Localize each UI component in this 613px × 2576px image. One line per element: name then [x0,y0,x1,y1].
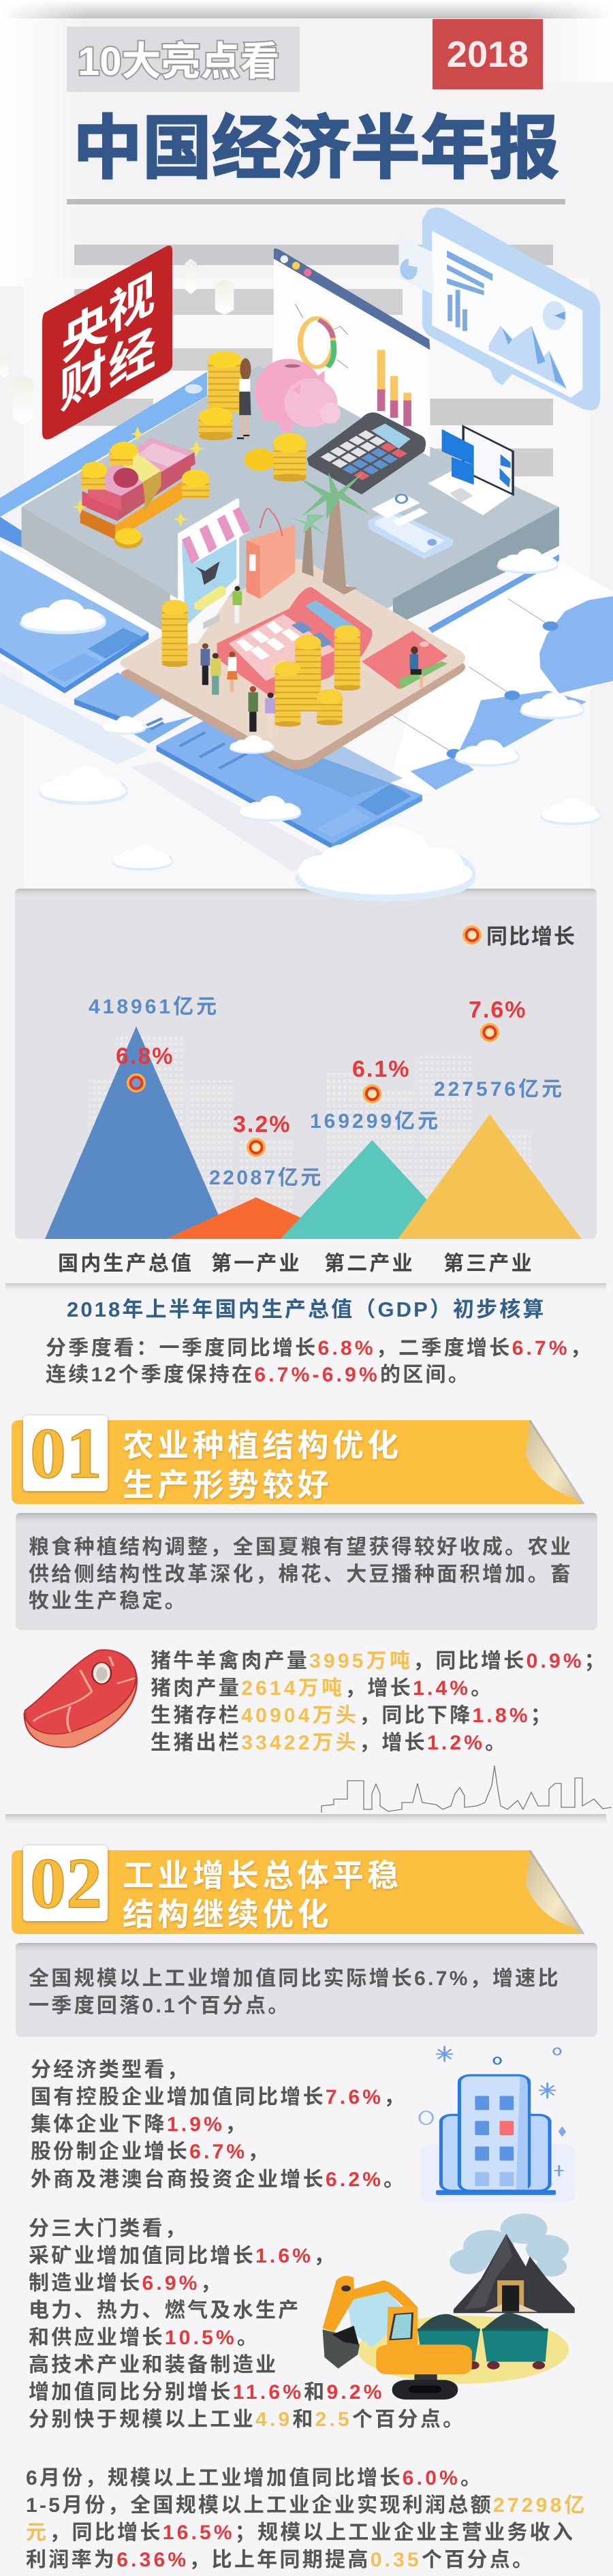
grey calculator [307,412,426,495]
chart: ghost skyline [89,1036,531,1230]
text: by industry sector: 高技术产业和装备制造业 [29,2354,278,2376]
text: by industry sector: 和供应业增长10.5%。 [29,2327,260,2349]
map pins and lines [393,599,559,758]
cloud group [20,549,601,870]
shopping bag [247,508,295,599]
blue plates [0,517,559,849]
value: 第一产业: 3.2% [233,1111,292,1137]
text: by industry sector: 增加值同比分别增长11.6%和9.2% [29,2381,385,2404]
legend: 同比增长: 同比增长 [486,925,576,949]
value: 第一产业 [209,1111,324,1189]
blue phone with cards [368,493,454,559]
excavator [323,2275,472,2399]
floating data card [398,208,600,410]
text: by industry sector: 分三大门类看， [29,2218,187,2240]
piggy bank [255,358,341,432]
isometric base: floor, blue plates, map and grey platform [0,366,613,872]
panel: section 02 summary: 全国规模以上工业增加值同比实际增长6.7%，增速比 [29,1967,561,1990]
panel: section 01 summary: 供给侧结构性改革深化，棉花、大豆播种面积增加。畜 [29,1563,573,1586]
text: by ownership type [31,2059,406,2191]
icon: steak [25,1650,137,1747]
white pillars [0,259,234,424]
text: meat output: 猪牛羊禽肉产量3995万吨，同比增长0.9%； [151,1650,607,1672]
text: June and profits: 1-5月份，全国规模以上工业企业实现利润总额27298亿 [26,2494,588,2517]
panel: section 02 summary [16,1943,597,2037]
chart axis labels: 第三产业 [443,1253,534,1275]
badge: 10大亮点看: 10大亮点看 [78,40,280,84]
chart axis labels: 第一产业 [211,1253,302,1275]
wallet [362,631,447,689]
value: 国内生产总值 [89,996,219,1092]
banner: section 02: 工业增长总体平稳 [123,1858,402,1893]
text: meat output: 猪肉产量2614万吨，增长1.4%。 [151,1677,494,1700]
value: 第三产业: 227576亿元 [434,1078,565,1101]
panel: GDP chart [15,889,597,1239]
chart board screen [274,249,430,457]
chart: mountains [45,1026,582,1239]
mountain [454,2234,575,2313]
value: 国内生产总值: 6.8% [116,1043,174,1069]
floor panels [0,542,613,872]
banner: section 02: 02 [30,1843,102,1923]
woman by coins [237,358,251,439]
badge: 2018: 2018 [447,34,529,75]
illustration: mine and excavator [323,2213,575,2399]
badge: 10大亮点看 [67,27,300,92]
banner: section 02: 结构继续优化 [123,1897,332,1932]
panel: section 01 summary: 牧业生产稳定。 [29,1590,187,1612]
text: by ownership type: 国有控股企业增加值同比增长7.6%， [31,2086,406,2109]
title rule [67,199,565,204]
title: 中国经济半年报 [73,110,559,187]
logo: 央视财经: 财 [59,341,107,420]
badge: 2018 [433,19,543,89]
banner: section 01: 农业种植结构优化 [123,1428,402,1463]
city skyline line art [321,1766,612,1813]
text: June and profits: 利润率为6.36%，比上年同期提高0.35个百分点。 [26,2549,535,2571]
value: 第一产业: 22087亿元 [209,1167,324,1189]
banner: section 01: 01 [30,1413,102,1493]
text: by industry sector: 制造业增长6.9%， [29,2272,223,2295]
panel: section 01 summary [16,1513,597,1630]
text: meat output: 生猪出栏33422万头，增长1.2%。 [151,1732,507,1754]
text: June and profits: 6月份，规模以上工业增加值同比增长6.0%。 [26,2467,483,2489]
people [200,586,423,736]
text: meat output: 生猪存栏40904万头，同比下降1.8%； [151,1704,553,1727]
mine entrance [485,2280,537,2312]
blue frame strip [0,371,207,517]
logo: 央视财经: 视 [108,264,155,343]
value: 第三产业 [434,997,565,1101]
text: by ownership type: 股份制企业增长6.7%， [31,2141,270,2163]
icon: office building [420,2046,575,2203]
chart axis labels: 国内生产总值 [58,1253,193,1275]
upper coin stacks [199,351,306,482]
big cloud [296,827,475,902]
text: by ownership type: 外商及港澳台商投资企业增长6.2%。 [31,2168,406,2191]
wagons [418,2312,548,2370]
text: June and profits [26,2467,588,2571]
tan platform [121,559,465,769]
banner: section 01: 生产形势较好 [123,1467,332,1503]
text: GDP quarterly: 分季度看：一季度同比增长6.8%，二季度增长6.7%， [46,1337,593,1360]
value: 第二产业 [310,1056,441,1133]
isometric illustration: upper objects [0,208,600,515]
text: by industry sector: 电力、热力、燃气及水生产 [29,2299,301,2322]
laptop [428,427,513,515]
logo: 央视财经 [42,245,172,440]
text: GDP quarterly [46,1337,593,1386]
yellow ground [358,2316,569,2384]
panel: section 02 summary: 一季度回落0.1个百分点。 [29,1995,291,2017]
value: 国内生产总值: 418961亿元 [89,996,219,1018]
money stacks [73,427,209,549]
logo: 央视财经: 央 [61,293,109,372]
palm trees [289,472,369,595]
light blue backdrop [346,2289,407,2347]
panel: section 01 summary: 粮食种植结构调整，全国夏粮有望获得较好收成。农业 [29,1536,573,1559]
divider [5,1283,606,1293]
chart axis labels: 第二产业 [324,1253,415,1275]
banner: section 02 [12,1843,584,1934]
shop phone [178,499,251,645]
value: 第二产业: 6.1% [352,1056,410,1082]
heading: GDP: 2018年上半年国内生产总值（GDP）初步核算 [67,1298,546,1321]
chart axis labels [58,1253,534,1275]
isometric illustration: lower objects and clouds [20,427,601,870]
text: by industry sector: 分别快于规模以上工业4.9和2.5个百分点。 [29,2408,465,2431]
header background [0,0,613,891]
text: by industry sector [29,2218,465,2431]
logo: 央视财经: 经 [108,319,156,398]
text: meat output [151,1650,607,1754]
value: 第三产业: 7.6% [469,997,527,1023]
divider [5,1814,606,1826]
banner: section 01 [12,1413,584,1504]
smoke [450,2213,569,2277]
text: by ownership type: 集体企业下降1.9%， [31,2113,247,2136]
text: by industry sector: 采矿业增加值同比增长1.6%， [29,2245,336,2267]
coin stacks on platform [162,600,360,726]
map shapes [411,596,613,790]
grey platform [22,366,559,666]
text: June and profits: 元，同比增长16.5%；规模以上工业企业主营业务收入 [26,2521,575,2544]
text: by ownership type: 分经济类型看， [31,2059,189,2081]
text: GDP quarterly: 连续12个季度保持在6.7%-6.9%的区间。 [46,1364,471,1386]
value: 第二产业: 169299亿元 [310,1110,441,1133]
calculator keys [321,430,407,480]
pink calculator [217,587,373,696]
